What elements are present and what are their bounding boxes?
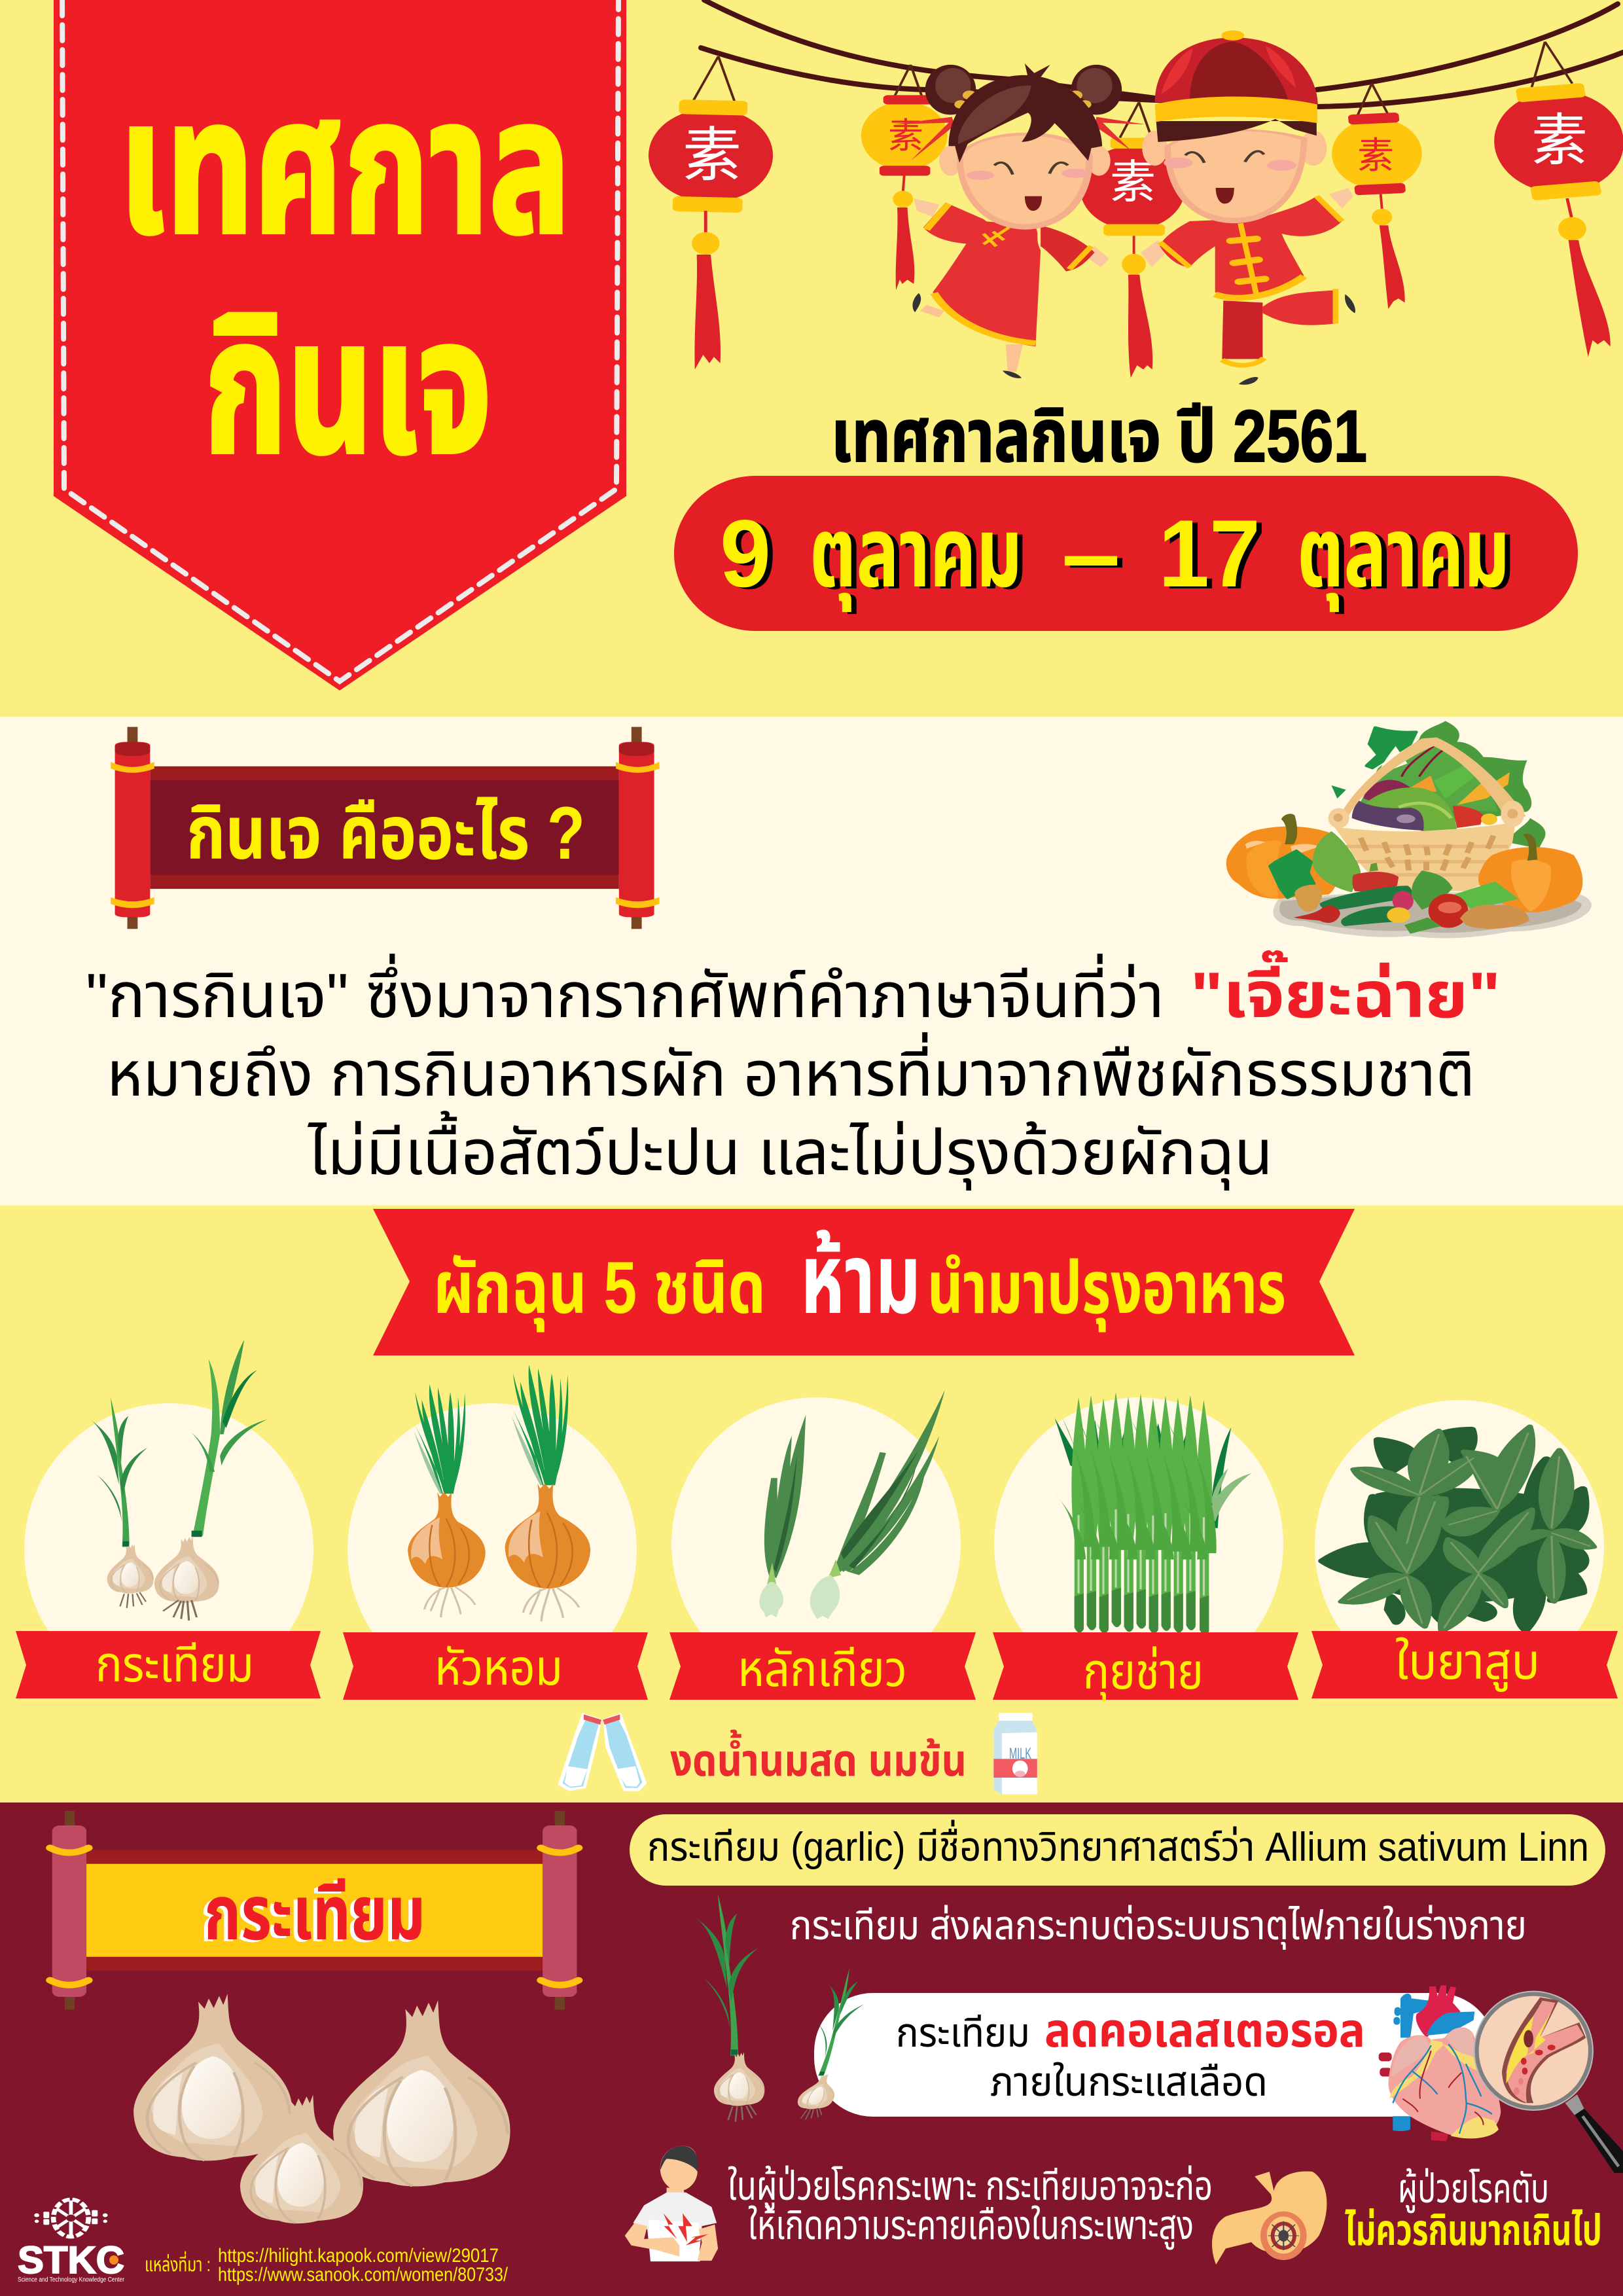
date shadow text: 17 [1164, 502, 1266, 609]
liver warning text [1345, 2166, 1602, 2254]
lanterns: 素 [1110, 145, 1156, 211]
heading banner: five pungent vegetables [373, 1209, 1355, 1355]
panel: what is vegetarian [0, 717, 1623, 1206]
boy [1141, 31, 1355, 385]
hanging ropes [701, 0, 1623, 107]
definition paragraph: หมายถึง การกินอาหารผัก อาหารที่มาจากพืชผักธรรมชาติ [107, 1032, 1475, 1109]
sources [145, 2245, 508, 2286]
heading banner: five pungent vegetables: ห้าม [800, 1224, 921, 1334]
panel: garlic plant: กระเทียม [96, 1637, 254, 1693]
sources: https://www.sanook.com/women/80733/ [218, 2264, 508, 2286]
lanterns: 素 [1531, 94, 1588, 176]
cholesterol pill: ลดคอเลสเตอรอล [1044, 2005, 1365, 2057]
festival year heading: เทศกาลกินเจ ปี 2561 [831, 395, 1367, 477]
scroll heading: garlic: กระเทียม [200, 1873, 421, 1958]
stomach text: ในผู้ป่วยโรคกระเพาะ กระเทียมอาจจะก่อ [728, 2164, 1213, 2211]
liver warning text: ผู้ป่วยโรคตับ [1398, 2166, 1549, 2214]
cholesterol pill [814, 1993, 1496, 2117]
panel: chives: กุยช่าย [1083, 1644, 1204, 1702]
definition paragraph: "เจี๊ยะฉ่าย" [1190, 950, 1501, 1031]
scroll heading: กินเจ คืออะไร ? [187, 792, 585, 875]
lanterns: 素 [683, 107, 741, 192]
date shadow text [725, 499, 1515, 614]
children characters [893, 31, 1355, 385]
definition paragraph: ไม่มีเนื้อสัตว์ปะปน และไม่ปรุงด้วยผักฉุน [307, 1111, 1273, 1191]
icon: man with stomach ache [625, 2146, 718, 2261]
date text: ตุลาคม [810, 497, 1022, 612]
lantern 1 [649, 99, 773, 369]
cholesterol pill: กระเทียม [896, 2011, 1030, 2056]
icon: milk bottles [558, 1713, 647, 1791]
panel: garlic plant [16, 1340, 321, 1698]
heading banner: five pungent vegetables: ผักฉุน 5 ชนิด [433, 1247, 766, 1332]
panel: onion [343, 1365, 648, 1700]
date text: ตุลาคม [1297, 497, 1510, 612]
milk text: งดน้ำนมสด นมข้น [670, 1729, 967, 1785]
date pill [674, 476, 1578, 631]
date text: 9 [720, 500, 771, 607]
panel: garlic details [0, 1803, 1623, 2296]
stomach text [728, 2164, 1213, 2250]
cholesterol pill: ภายในกระแสเลือด [990, 2060, 1268, 2105]
date shadow text: ตุลาคม [815, 499, 1027, 614]
date text: – [1061, 500, 1120, 607]
panel: spring onion: หลักเกียว [738, 1641, 907, 1697]
lanterns: 素 [888, 107, 923, 158]
icon: garlic plants [696, 1894, 882, 2122]
definition paragraph [86, 950, 1501, 1191]
scroll heading [111, 727, 659, 929]
milk label: MILK [1009, 1745, 1031, 1763]
date shadow text: 9 [725, 502, 776, 609]
logo: STKC [18, 2200, 125, 2284]
no fresh or condensed milk row [558, 1713, 1037, 1794]
scroll heading: garlic [50, 1811, 579, 2010]
icon: garlic bulbs [134, 1994, 510, 2223]
panel: chives [993, 1392, 1298, 1702]
sources: แหล่งที่มา : [145, 2251, 211, 2276]
lantern 5 [1490, 83, 1623, 357]
date shadow text: – [1067, 502, 1126, 609]
definition paragraph: "การกินเจ" ซึ่งมาจากรากศัพท์คำภาษาจีนที่ว่า [86, 954, 1164, 1031]
title line 2: กินเจ [204, 281, 492, 493]
title line 1: เทศกาล [119, 61, 571, 273]
date shadow text: ตุลาคม [1302, 499, 1515, 614]
icon: milk carton [993, 1713, 1037, 1794]
logo: STKC: Science and Technology Knowledge Center [18, 2276, 125, 2284]
scientific name pill [630, 1814, 1605, 1886]
date text: 17 [1158, 500, 1260, 607]
scroll heading: garlic: กระเทียม [204, 1871, 425, 1956]
icon: heart and magnifier [1379, 1985, 1623, 2173]
sources: https://hilight.kapook.com/view/29017 [218, 2245, 499, 2267]
icon: vegetable basket [1226, 721, 1592, 938]
heading banner: five pungent vegetables: นำมาปรุงอาหาร [927, 1247, 1286, 1332]
stomach text: ให้เกิดความระคายเคืองในกระเพาะสูง [748, 2203, 1194, 2250]
logo: STKC: STKC [18, 2239, 124, 2282]
panel: tobacco leaves [1311, 1400, 1618, 1698]
lantern 4 [1332, 113, 1422, 309]
panel: spring onion [669, 1390, 976, 1700]
icon: stomach [1212, 2172, 1327, 2265]
girl [893, 63, 1145, 378]
lanterns: 素 [1357, 126, 1394, 179]
lantern 3 [1080, 137, 1185, 378]
date text [720, 497, 1510, 612]
panel: tobacco leaves: ใบยาสูบ [1395, 1634, 1540, 1692]
pennant with title [54, 0, 626, 691]
lanterns [649, 42, 1623, 378]
panel: onion: หัวหอม [435, 1640, 563, 1696]
lantern 2 [861, 95, 948, 290]
fire element text: กระเทียม ส่งผลกระทบต่อระบบธาตุไฟภายในร่างกาย [790, 1903, 1527, 1950]
